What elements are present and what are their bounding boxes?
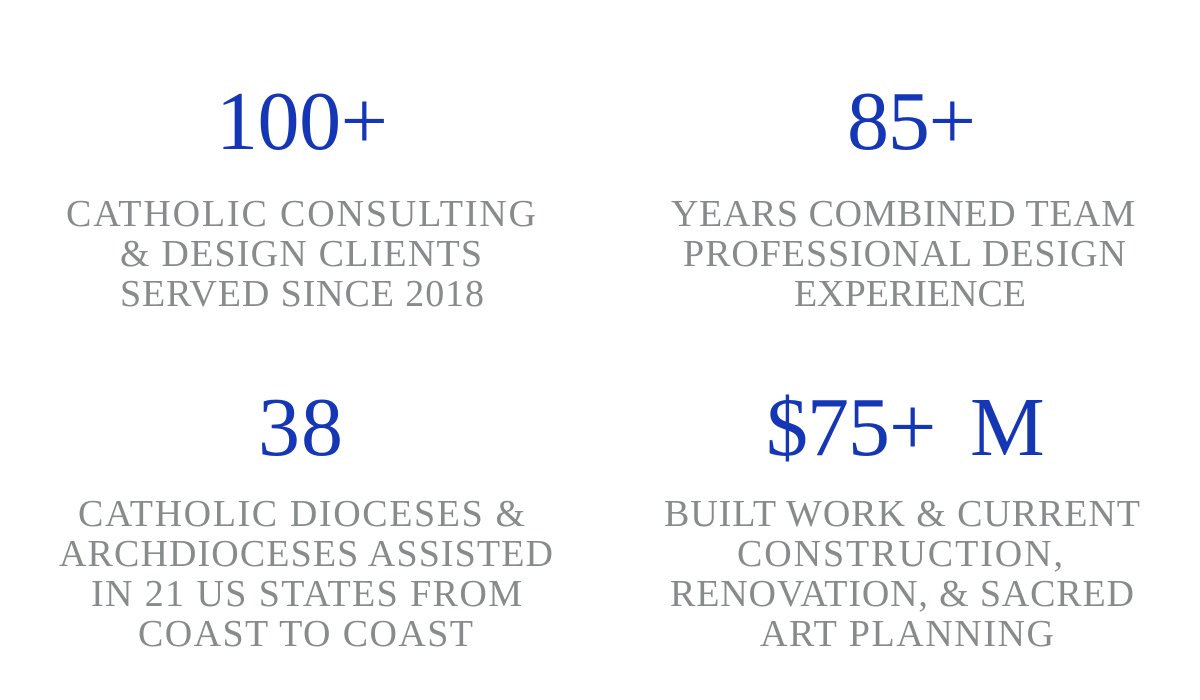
stat caption: dioceses assisted: CATHOLIC DIOCESES & <box>78 493 525 535</box>
stat caption: dioceses assisted: COAST TO COAST <box>138 613 473 655</box>
stat number: $75+ M: M <box>970 381 1045 474</box>
stat caption: built work: BUILT WORK & CURRENT <box>664 493 1140 535</box>
stat caption: clients served: & DESIGN CLIENTS <box>120 233 482 275</box>
stat caption: clients served <box>66 193 536 315</box>
stat number: $75+ M: $75+ <box>766 381 935 474</box>
stat caption: years of experience: YEARS COMBINED TEAM <box>671 193 1135 235</box>
stat caption: clients served: CATHOLIC CONSULTING <box>66 193 536 235</box>
stat caption: dioceses assisted <box>59 493 553 655</box>
stat caption: built work: CONSTRUCTION, <box>737 533 1063 575</box>
stat caption: built work: ART PLANNING <box>760 613 1054 655</box>
stat number: 38: 38 <box>258 381 343 474</box>
stat caption: years of experience: EXPERIENCE <box>794 273 1026 315</box>
stat caption: dioceses assisted: ARCHDIOCESES ASSISTED <box>59 533 553 575</box>
stat caption: years of experience: PROFESSIONAL DESIGN <box>683 233 1126 275</box>
stat caption: dioceses assisted: IN 21 US STATES FROM <box>91 573 522 615</box>
stat caption: clients served: SERVED SINCE 2018 <box>120 273 484 315</box>
stat number: 100+: 100+ <box>216 75 388 168</box>
stat caption: years of experience <box>671 193 1135 315</box>
stat number: 85+: 85+ <box>847 75 976 168</box>
stat caption: built work: RENOVATION, & SACRED <box>670 573 1134 615</box>
stat caption: built work <box>664 493 1140 655</box>
